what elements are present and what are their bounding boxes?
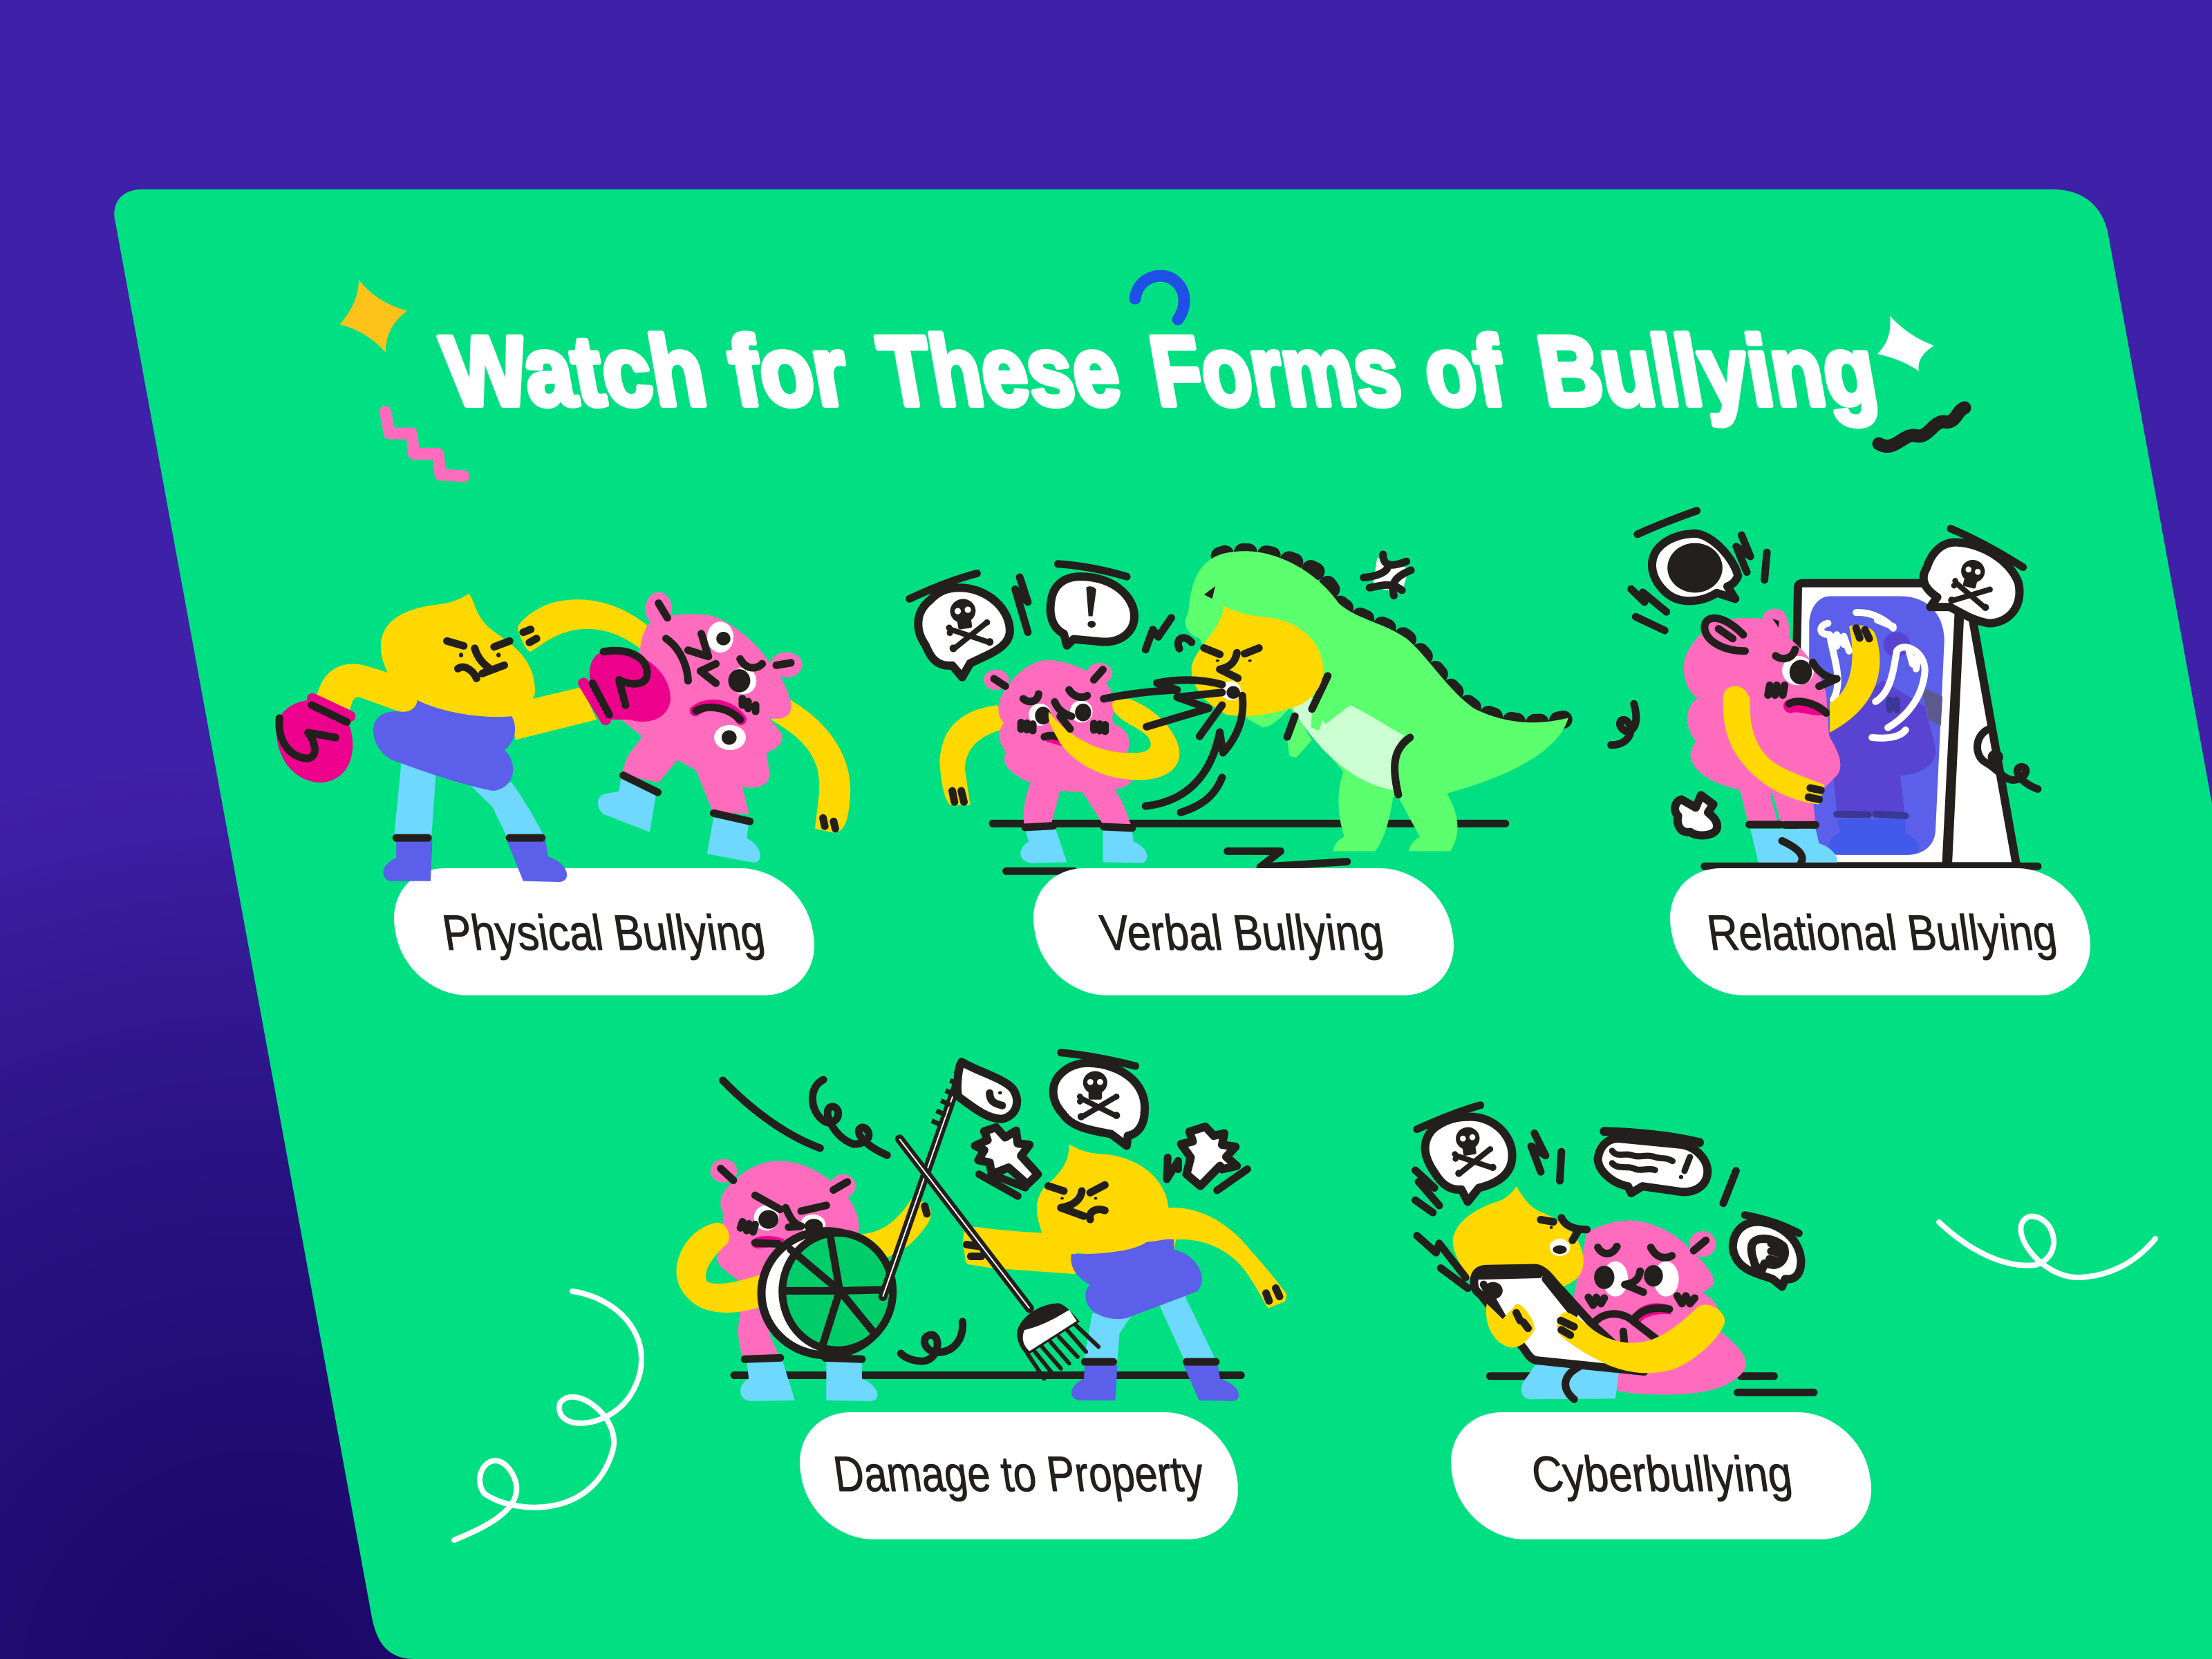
dinosaur: [1185, 551, 1568, 851]
illustration: verbal bullying: [910, 551, 1568, 871]
title: Watch: [435, 316, 713, 427]
label pill: cyberbullying: Cyberbullying: [1528, 1447, 1795, 1502]
decoration: white curl right: [1939, 1217, 2155, 1277]
pink character: [677, 1159, 931, 1401]
mirror with stand: [1792, 583, 2016, 866]
decoration: blue arc: [1135, 276, 1184, 319]
tablet: [1474, 1268, 1657, 1371]
broom: [899, 1139, 1098, 1378]
skull icon: cyber bubble: [1448, 1124, 1497, 1177]
illustration: cyberbullying: [1416, 1105, 1814, 1399]
anger mark: [1364, 554, 1411, 596]
decoration: white sparkle: [1877, 316, 1934, 371]
yellow shouting head: [1192, 606, 1323, 716]
title: Forms: [1142, 316, 1408, 427]
hands and hugging arm: [1486, 1304, 1725, 1373]
scribble speech bubble: [1631, 511, 1767, 630]
pink character: [1571, 1220, 1746, 1395]
shout lines: [1104, 618, 1243, 812]
mop: [883, 1062, 1017, 1297]
pink character: [598, 592, 850, 863]
left boxing glove: [276, 699, 353, 782]
skull icon: verbal bubble: [942, 595, 994, 653]
label pill: verbal bullying: [1024, 868, 1463, 995]
yellow boxer: [317, 594, 597, 882]
decoration: yellow sparkle: [340, 280, 407, 353]
skull icon: property bubble: [1077, 1071, 1120, 1121]
decoration: pink zigzag: [385, 412, 464, 476]
light blue boot: [1521, 1364, 1620, 1399]
pink character: [1684, 609, 2038, 867]
label pill: damage to property: Damage to Property: [830, 1447, 1208, 1502]
wheel shield: [761, 1231, 893, 1355]
label pill: relational bullying: Relational Bullying: [1704, 906, 2060, 961]
label pill: damage to property: [790, 1412, 1248, 1539]
label pill: relational bullying: [1660, 868, 2100, 995]
skull icon: relational bubble: [1947, 556, 1999, 613]
skull speech bubble: [1924, 529, 2023, 624]
decoration: black squiggle: [1879, 408, 1965, 447]
comment speech bubble: [1598, 1132, 1707, 1193]
thumbs down speech bubble: [1733, 1215, 1801, 1286]
mirror reflection: [1821, 612, 1942, 855]
speech bubble with skull and bursts: [975, 1053, 1247, 1196]
title: Bullying: [1530, 316, 1884, 427]
label pill: cyberbullying: [1441, 1412, 1881, 1539]
title: of: [1415, 316, 1512, 427]
illustration: relational bullying: [1611, 511, 2038, 867]
yellow rear arm: [518, 599, 650, 652]
exclamation speech bubble: [1015, 564, 1134, 646]
illustration: physical bullying: [276, 592, 850, 882]
yellow character head: [1453, 1186, 1587, 1300]
pink victim: [939, 660, 1179, 863]
label pill: physical bullying: Physical Bullying: [439, 905, 769, 961]
title: for: [720, 316, 856, 427]
skull speech bubble: [1416, 1105, 1736, 1288]
label pill: verbal bullying: Verbal Bullying: [1097, 906, 1387, 961]
title: These: [871, 316, 1127, 427]
skull speech bubble: [910, 574, 1010, 677]
label pill: physical bullying: [384, 868, 824, 995]
yellow character: [962, 1144, 1287, 1401]
illustration: damage to property: [677, 1053, 1287, 1401]
ground line and curls: [723, 1080, 1241, 1376]
ground lines: [993, 823, 1506, 871]
side curls and puff: [1611, 704, 2038, 836]
ground lines: [1490, 1376, 1814, 1392]
decoration: white curl left: [454, 1291, 641, 1540]
right boxing glove: [583, 650, 671, 722]
title: [435, 316, 1884, 427]
